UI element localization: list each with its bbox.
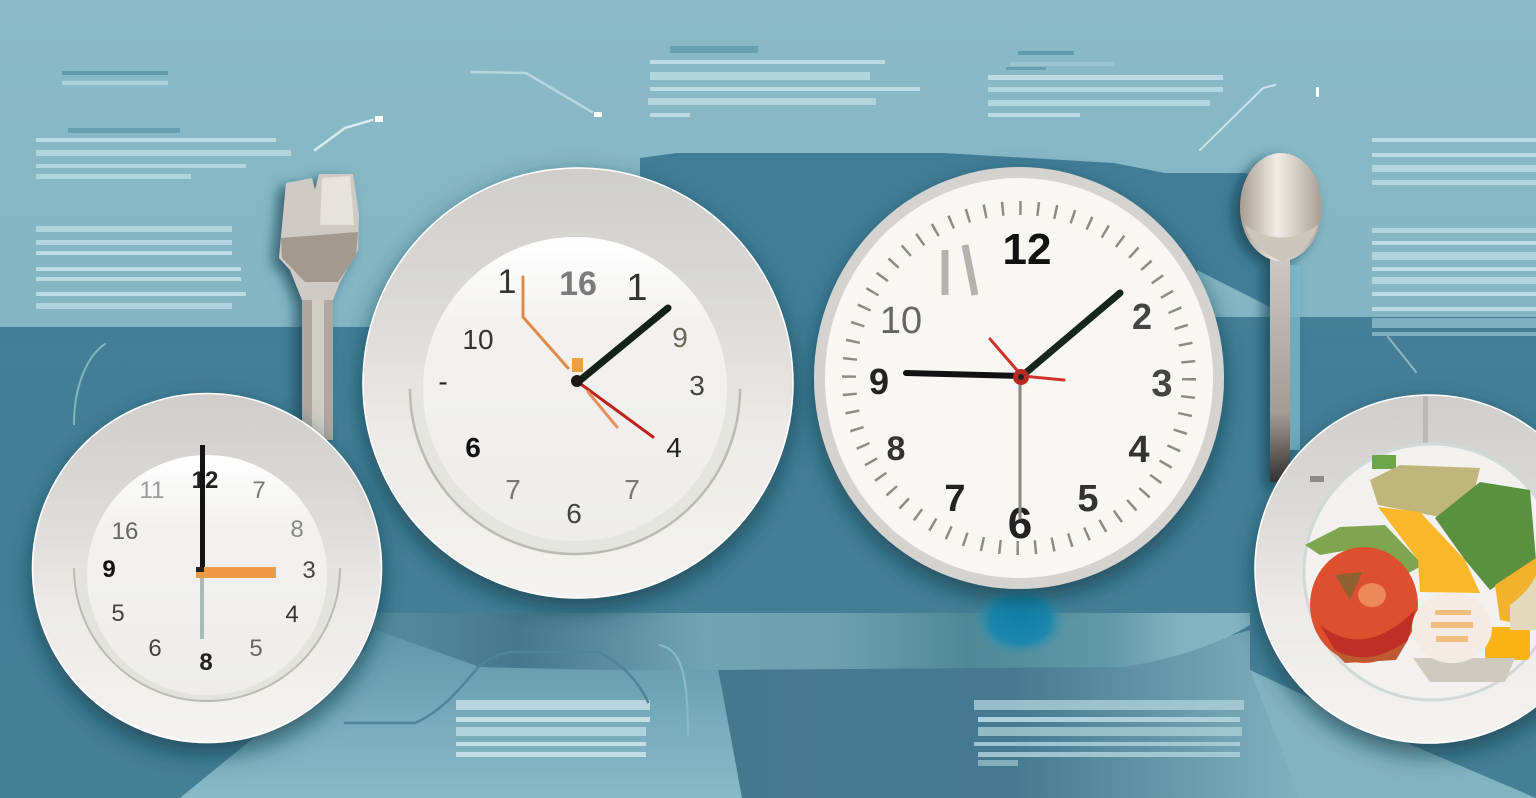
food: tomato: [1310, 547, 1418, 663]
clock: large wall clock: [814, 167, 1224, 589]
clock numerals left: [102, 467, 316, 676]
clock numerals centre-left: 10: [462, 324, 494, 355]
clock numerals large: 4: [1128, 429, 1150, 471]
clock numerals large: 7: [944, 478, 966, 520]
clock numerals centre-left: 6: [566, 498, 582, 529]
text block: top left caption: [62, 71, 168, 85]
clock numerals large: 12: [1003, 225, 1051, 274]
clock numerals large: 5: [1077, 478, 1099, 520]
callout lines: [74, 72, 1416, 735]
clock numerals centre-left: 16: [559, 265, 597, 303]
clock numerals large: 6: [1008, 499, 1032, 548]
text block: left upper paragraph: [36, 128, 291, 179]
clock numerals centre-left: 9: [672, 322, 688, 353]
clock numerals large: 10: [880, 300, 922, 342]
clock numerals left: 8: [199, 649, 213, 676]
text block: bottom centre paragraph: [456, 700, 650, 757]
clock numerals centre-left: 4: [666, 432, 682, 463]
clock hands large: [906, 293, 1120, 518]
food: lettuce: [1305, 455, 1536, 590]
clock numerals large: 9: [869, 361, 889, 402]
clock numerals left: 8: [290, 516, 304, 543]
clock numerals centre-left: 3: [689, 370, 705, 401]
clock numerals left: 12: [192, 467, 218, 494]
clock numerals centre-left: 1: [626, 267, 648, 309]
food: egg slice: [1412, 593, 1515, 682]
text block: bottom right paragraph: [974, 700, 1244, 766]
text block: top centre paragraph: [648, 46, 920, 117]
icon: spoon: [1240, 153, 1322, 482]
text block: left lower paragraph: [36, 226, 246, 309]
plate: clock centre-left: [363, 168, 793, 598]
minute ticks: [849, 208, 1189, 548]
clock numerals left: 6: [148, 635, 162, 662]
clock numerals left: 7: [252, 477, 266, 504]
clock numerals left: 5: [111, 600, 125, 627]
clock numerals large: 2: [1132, 296, 1152, 337]
clock numerals left: 5: [249, 635, 263, 662]
clock numerals large: [869, 225, 1173, 548]
clock numerals left: 9: [102, 556, 116, 583]
clock hands centre-left: [523, 277, 668, 437]
plate: food salad: [1255, 395, 1536, 743]
clock numerals centre-left: 1: [498, 263, 516, 301]
clock hands left: [196, 445, 276, 639]
icon: fork: [279, 174, 359, 440]
text block: top right-centre paragraph: [988, 51, 1223, 117]
clock numerals centre-left: 7: [505, 474, 521, 505]
clock numerals centre-left: -: [438, 366, 448, 397]
clock numerals centre-left: 6: [465, 432, 481, 463]
clock numerals left: 3: [302, 557, 316, 584]
clock numerals left: 11: [140, 477, 164, 504]
clock numerals centre-left: [438, 263, 705, 529]
plate: clock left: [32, 394, 382, 742]
clock numerals left: 16: [112, 518, 138, 545]
text block: lower right paragraph: [1372, 228, 1536, 336]
clock numerals left: 4: [285, 601, 299, 628]
clock numerals large: 8: [887, 430, 905, 468]
clock numerals centre-left: 7: [624, 474, 640, 505]
food: yellow pepper: [1378, 507, 1536, 660]
text block: upper right paragraph: [1372, 138, 1536, 185]
clock numerals large: 3: [1151, 363, 1173, 405]
